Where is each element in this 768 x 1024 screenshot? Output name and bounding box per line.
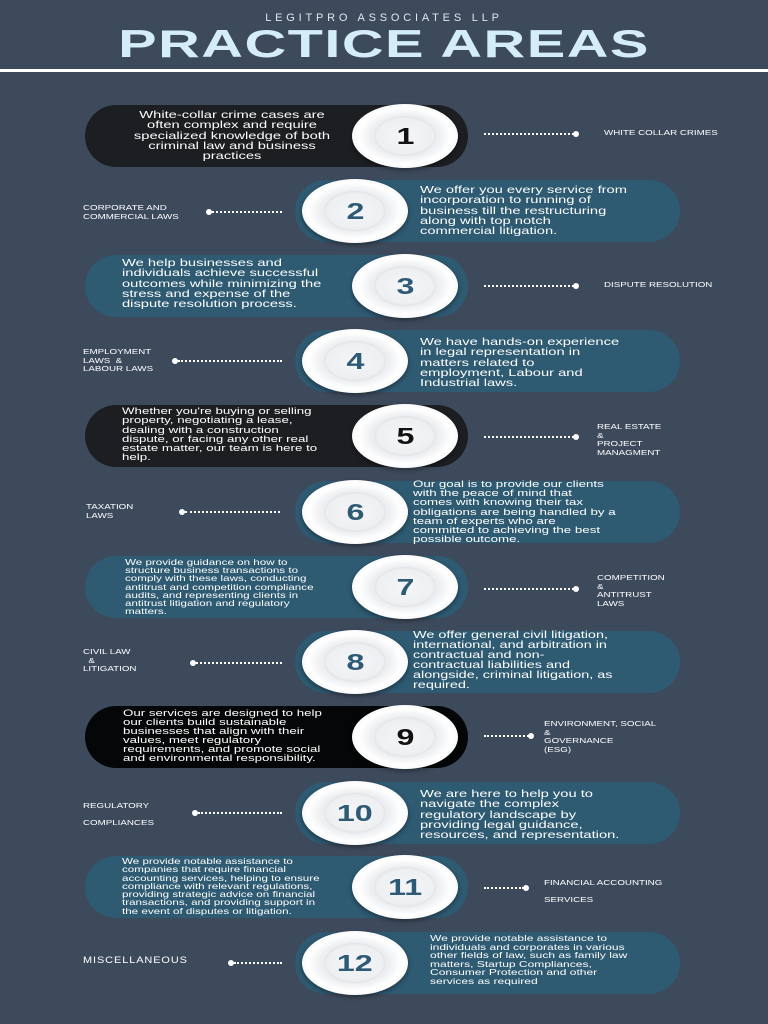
row 11: FINANCIAL ACCOUNTING	[544, 878, 662, 887]
row 2: business till the restructuring	[420, 205, 606, 217]
row 5: estate matter, our team is here to	[122, 443, 317, 454]
row 9: &	[544, 728, 551, 736]
row 10	[83, 781, 680, 848]
row 2: COMMERCIAL LAWS	[83, 212, 179, 220]
row 7: comply with these laws, conducting	[125, 573, 306, 583]
row 2: incorporation to running of	[420, 194, 591, 206]
row 9: our clients build sustainable	[123, 717, 286, 728]
row 8: CIVIL LAW	[83, 647, 131, 656]
row 7: 7	[396, 574, 414, 600]
row 1: specialized knowledge of both	[134, 130, 330, 142]
row 10: navigate the complex	[420, 798, 559, 810]
row 6: Our goal is to provide our clients	[413, 479, 604, 490]
row 11: providing strategic advice on financial	[122, 889, 315, 899]
row 11: the event of disputes or litigation.	[122, 906, 292, 916]
row 3: dispute resolution process.	[122, 298, 297, 310]
row 5: Whether you're buying or selling	[122, 406, 312, 417]
row 6: possible outcome.	[413, 534, 520, 545]
row 4: LABOUR LAWS	[83, 364, 153, 373]
row 1: 1	[396, 122, 414, 148]
row 4: in legal representation in	[420, 346, 580, 358]
row 11: companies that require financial	[122, 864, 286, 874]
row 2: We offer you every service from	[420, 184, 627, 196]
row 4: EMPLOYMENT	[83, 347, 151, 356]
row 7: structure business transactions to	[125, 565, 298, 575]
row 10: REGULATORY	[83, 801, 149, 810]
row 2: 2	[346, 198, 364, 224]
row 4: LAWS &	[83, 356, 122, 364]
row 5: &	[597, 430, 604, 440]
row 12: individuals and corporates in various	[430, 942, 625, 952]
row 11: accounting services, helping to ensure	[122, 873, 320, 883]
row 12: 12	[337, 950, 373, 976]
row 9: (ESG)	[544, 744, 571, 754]
row 7: ANTITRUST	[597, 590, 652, 599]
row 6: with the peace of mind that	[413, 488, 572, 499]
row 3: We help businesses and	[122, 257, 282, 269]
row 12: other fields of law, such as family law	[430, 950, 627, 960]
row 2	[83, 179, 680, 246]
row 10: providing legal guidance,	[420, 819, 583, 831]
row 5: PROJECT	[597, 439, 643, 448]
row 5: REAL ESTATE	[597, 422, 661, 431]
row 8: &	[88, 656, 95, 664]
row 2: along with top notch	[420, 215, 551, 227]
row 12	[83, 931, 680, 998]
row 8	[83, 630, 680, 698]
row 5: 5	[396, 422, 414, 448]
row 7: LAWS	[597, 598, 624, 608]
row 7: COMPETITION	[597, 573, 665, 582]
row 7: antitrust and competition compliance	[125, 582, 314, 592]
row 8: 8	[346, 648, 364, 674]
row 9: and environmental responsibility.	[123, 753, 316, 764]
row 10: resources, and representation.	[420, 829, 619, 841]
row 1: practices	[203, 150, 261, 162]
row 3: DISPUTE RESOLUTION	[604, 280, 712, 289]
row 5: dispute, or facing any other real	[122, 434, 308, 445]
row 1: WHITE COLLAR CRIMES	[604, 128, 718, 137]
row 12: matters, Startup Compliances,	[430, 958, 592, 968]
row 11: 11	[388, 874, 422, 900]
row 4: We have hands-on experience	[420, 336, 619, 348]
row 1: White-collar crime cases are	[139, 109, 325, 121]
subtitle: LEGITPRO ASSOCIATES LLP	[265, 12, 503, 24]
row 12: services as required	[430, 976, 538, 986]
row 10: regulatory landscape by	[420, 809, 576, 821]
row 11	[85, 855, 662, 922]
row 8: contractual liabilities and	[413, 660, 570, 671]
row 12: We provide notable assistance to	[430, 933, 607, 943]
row 8: We offer general civil litigation,	[413, 630, 608, 641]
row 9: GOVERNANCE	[544, 736, 613, 745]
row 7	[85, 555, 665, 622]
row 9	[85, 705, 656, 772]
row 6: 6	[346, 498, 364, 524]
row 10: 10	[337, 800, 373, 826]
row 2: CORPORATE AND	[83, 203, 167, 212]
row 8: LITIGATION	[83, 664, 136, 673]
row 4: Industrial laws.	[420, 377, 517, 389]
row 9: ENVIRONMENT, SOCIAL	[544, 719, 656, 728]
row 12: Consumer Protection and other	[430, 967, 597, 977]
row 11: compliance with relevant regulations,	[122, 881, 312, 891]
row 6: TAXATION	[86, 502, 133, 511]
row 11: We provide notable assistance to	[122, 856, 293, 866]
row 6: committed to achieving the best	[413, 525, 600, 536]
row 9: businesses that align with their	[123, 726, 304, 737]
row 4: employment, Labour and	[420, 367, 583, 379]
row 7: &	[597, 582, 604, 590]
row 11: transactions, and providing support in	[122, 897, 315, 907]
row 5	[85, 404, 661, 472]
row 7: matters.	[125, 606, 167, 616]
row 9: Our services are designed to help	[123, 708, 322, 719]
row 5: MANAGMENT	[597, 448, 660, 456]
row 6	[86, 479, 680, 548]
title: PRACTICE AREAS	[118, 23, 650, 66]
row 5: property, negotiating a lease,	[122, 415, 293, 426]
row 10: We are here to help you to	[420, 788, 593, 800]
row 10: COMPLIANCES	[83, 818, 154, 827]
row 6: team of experts who are	[413, 516, 556, 527]
row 8: alongside, criminal litigation, as	[413, 670, 613, 681]
row 5: help.	[122, 452, 151, 463]
row 1	[85, 104, 718, 172]
row 1: criminal law and business	[148, 140, 316, 152]
row 5: dealing with a construction	[122, 425, 279, 436]
row 9: values, meet regulatory	[123, 735, 261, 746]
row 8: required.	[413, 680, 470, 691]
row 8: contractual and non-	[413, 650, 544, 661]
row 3: stress and expense of the	[122, 288, 290, 300]
row 7: We provide guidance on how to	[125, 557, 288, 567]
row 9: 9	[396, 724, 414, 750]
row 7: antitrust litigation and regulatory	[125, 598, 290, 608]
row 8: international, and arbitration in	[413, 640, 607, 651]
row 12: MISCELLANEOUS	[83, 955, 188, 966]
row 1: often complex and require	[147, 119, 317, 131]
row 3	[85, 254, 712, 322]
row 6: comes with knowing their tax	[413, 497, 583, 508]
row 9: requirements, and promote social	[123, 744, 320, 755]
row 3: individuals achieve successful	[122, 267, 318, 279]
row 2: commercial litigation.	[420, 225, 557, 237]
row 3: outcomes while minimizing the	[122, 278, 321, 290]
row 11: SERVICES	[544, 895, 593, 904]
row 7: audits, and representing clients in	[125, 590, 298, 600]
row 6: LAWS	[86, 510, 113, 520]
row 4: 4	[346, 348, 364, 374]
row 4: matters related to	[420, 357, 534, 369]
row 3: 3	[396, 272, 414, 298]
row 6: obligations are being handled by a	[413, 507, 616, 518]
row 4	[83, 329, 680, 396]
